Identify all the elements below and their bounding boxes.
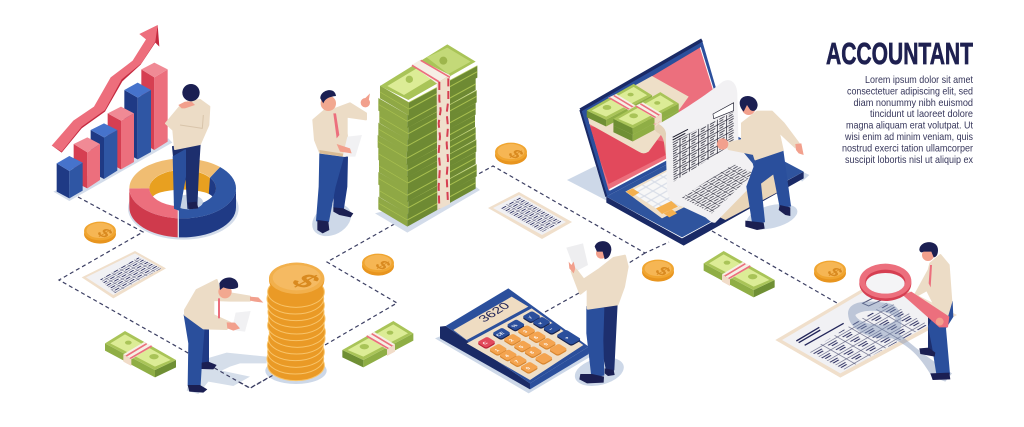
bar 6 [141, 63, 168, 150]
rising arrow [52, 25, 159, 153]
description text: wisi enim ad minim veniam, quis [844, 131, 973, 143]
money bundle center [342, 321, 413, 367]
shoes [188, 362, 217, 393]
key labels: 6 [533, 336, 540, 340]
keyboard [625, 160, 699, 218]
head [595, 241, 611, 259]
key labels: 3 [522, 330, 530, 334]
key labels: 7 [514, 360, 521, 364]
head [218, 278, 238, 298]
key labels: 8 [529, 351, 536, 355]
key labels: 2 [508, 338, 516, 343]
donut chart with standing man [128, 84, 239, 240]
lower receipt table [681, 164, 754, 213]
tie [929, 265, 932, 287]
coins: $ [370, 258, 396, 273]
tie [333, 113, 339, 138]
key labels: 5 [518, 345, 526, 349]
bar 4 [108, 107, 134, 169]
description text: tincidunt ut laoreet dolore [870, 108, 973, 120]
man with magnifier [859, 242, 953, 380]
key labels: √ [526, 315, 535, 320]
magnifying glass [859, 264, 949, 327]
key labels: % [511, 323, 520, 329]
description text: diam nonummy nibh euismod [854, 97, 973, 109]
paper [343, 135, 362, 157]
coins: $ [92, 226, 118, 241]
head [320, 90, 336, 111]
large document [775, 277, 957, 378]
head [919, 242, 938, 261]
money bundle right [704, 251, 775, 297]
shirt [914, 255, 951, 317]
small document left [82, 251, 166, 298]
description text: magna aliquam erat volutpat. Ut [846, 120, 973, 132]
key labels [482, 315, 571, 371]
shirt [727, 112, 799, 159]
magnifier shadow [848, 301, 952, 382]
paper [232, 311, 251, 332]
trousers [747, 150, 790, 223]
coins: $ [650, 264, 676, 279]
calculator [435, 288, 589, 393]
description text: consectetuer adipiscing elit, sed [847, 85, 973, 97]
hands [717, 138, 804, 155]
coins [84, 143, 848, 283]
bar 5 [124, 83, 151, 159]
coin stack: $ [283, 270, 328, 293]
description text: suscipit lobortis nisl ut aliquip ex [845, 154, 974, 166]
hands [337, 93, 370, 153]
bar 3 [91, 123, 117, 179]
shoes [317, 207, 353, 233]
paper [566, 243, 588, 272]
key labels: 9 [543, 342, 550, 347]
red C key [477, 337, 496, 349]
key labels: C [482, 341, 490, 346]
key labels: − [548, 327, 555, 332]
hand on handle [936, 318, 944, 326]
laptop screen [580, 40, 729, 197]
money stack [375, 44, 480, 233]
shoes [919, 348, 950, 380]
man pointing [307, 90, 370, 243]
hands [227, 297, 263, 331]
description text: Lorem ipsum dolor sit amet [865, 74, 973, 86]
laptop base [606, 132, 804, 246]
growth chart with arrow [52, 25, 172, 201]
shirt [572, 256, 627, 308]
display: 3620 [475, 300, 513, 324]
man viewing chart [166, 84, 209, 210]
shoes [579, 368, 615, 383]
shirt [185, 280, 250, 329]
key labels: × [537, 321, 545, 326]
man with paper from behind [566, 241, 627, 391]
bar 2 [74, 137, 100, 188]
small document center [488, 192, 572, 239]
key labels: 4 [504, 354, 511, 358]
hand [569, 262, 575, 273]
cream paper underside [712, 168, 787, 220]
orange keys [489, 325, 568, 374]
description text [842, 74, 974, 166]
dashed connector lines [59, 166, 837, 388]
key labels: 0 [525, 366, 532, 371]
key labels: 1 [494, 348, 501, 353]
cream tray [587, 76, 689, 153]
trousers [317, 153, 347, 222]
description text: nostrud exerci tation ullamcorper [842, 142, 973, 154]
trousers [184, 315, 208, 385]
key labels: + [564, 336, 571, 340]
blue keys [492, 311, 581, 346]
bar 1 [57, 156, 83, 198]
coins: $ [503, 147, 529, 162]
receipt table [673, 112, 734, 182]
laptop with receipt [567, 40, 809, 246]
paper strap [412, 60, 450, 210]
trousers [929, 302, 953, 374]
money bundle left [105, 331, 176, 377]
key labels: CE [495, 331, 507, 338]
trousers [587, 303, 617, 377]
bent man with coin stack [184, 263, 328, 394]
tie [218, 298, 220, 318]
coin stack [267, 263, 328, 381]
donut ring [129, 158, 236, 237]
shirt [313, 103, 366, 157]
money on screen [587, 84, 679, 141]
receipt paper [655, 80, 757, 223]
coins: $ [822, 265, 848, 280]
accountant at laptop [717, 96, 804, 234]
head [740, 96, 758, 115]
shoes [745, 205, 790, 230]
